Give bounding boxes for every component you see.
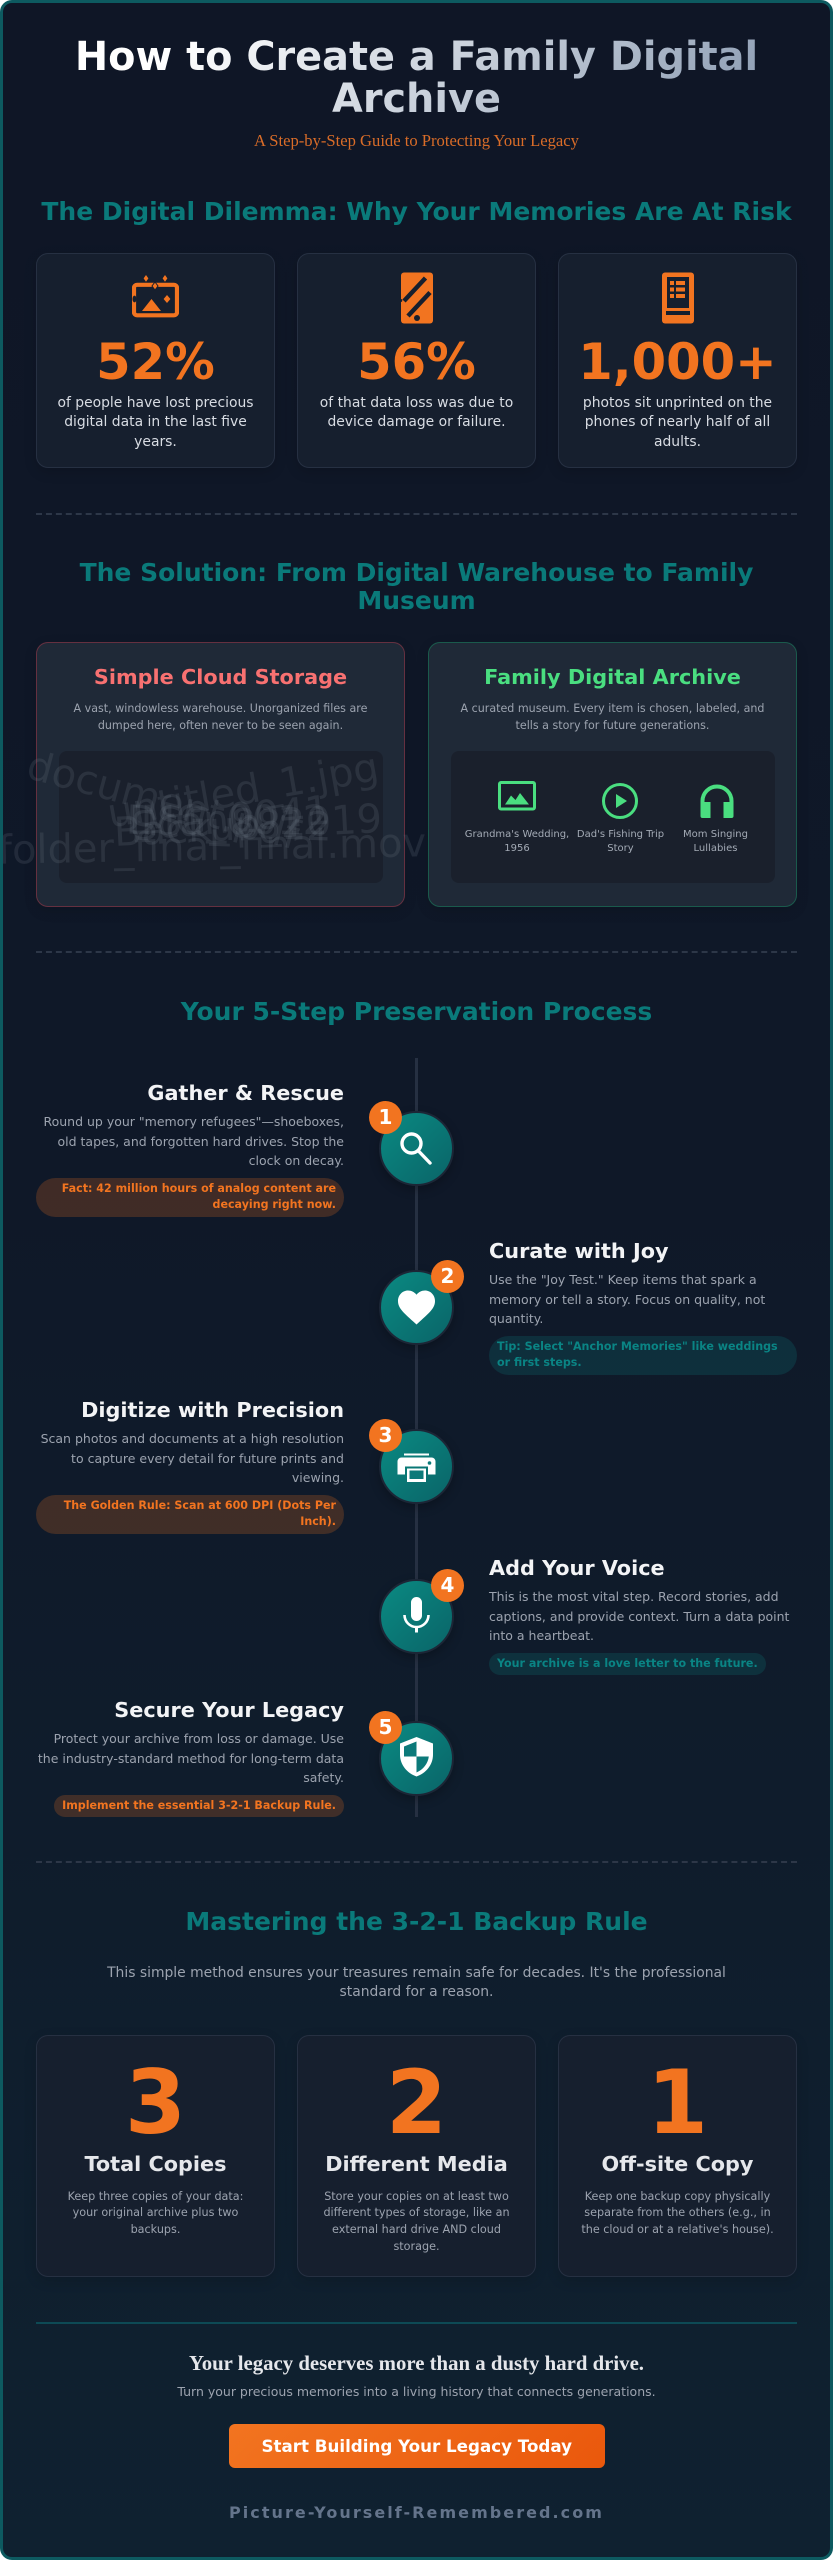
panel description: tells a story for future generations. <box>516 719 709 732</box>
step 3 text: Inch). <box>300 1515 336 1528</box>
footer url: Picture-Yourself-Remembered.com <box>229 2502 604 2522</box>
label: 1956 <box>504 842 530 854</box>
curated items box <box>450 751 774 883</box>
badge 1 <box>369 1101 402 1134</box>
step 5 text <box>38 1698 344 1817</box>
subtitle: A Step-by-Step Guide to Protecting Your Legacy <box>254 131 579 150</box>
stat description: of people have lost precious <box>57 394 254 410</box>
icon: microphone <box>403 1597 430 1632</box>
panel description: dumped here, often never to be seen again. <box>98 719 343 732</box>
badge 1: 1 <box>379 1105 392 1129</box>
panel title: Simple Cloud Storage <box>94 665 347 689</box>
card description: Keep one backup copy physically <box>585 2190 770 2203</box>
badge 4: 4 <box>441 1573 454 1597</box>
title: Archive <box>332 76 501 122</box>
backup intro text <box>107 1964 726 2000</box>
panel description <box>74 702 367 732</box>
step 1 text: Round up your "memory refugees"—shoeboxes, <box>43 1114 344 1129</box>
title: How to Create a Family Digital <box>75 34 758 80</box>
badge 5 <box>369 1711 402 1744</box>
label: Grandma's Wedding, <box>465 828 569 840</box>
scattered files box: folder_final_final.mov <box>0 820 427 874</box>
step 3 text <box>36 1398 344 1534</box>
step 2 text: Use the "Joy Test." Keep items that spark a <box>489 1272 757 1287</box>
stat description: years. <box>134 434 177 450</box>
panel: family digital archive <box>428 642 797 907</box>
step 5 text: Secure Your Legacy <box>114 1698 344 1722</box>
step 4 text: Add Your Voice <box>489 1556 665 1580</box>
step 3 text: to capture every detail for future prints and <box>71 1450 344 1466</box>
card description: Store your copies on at least two <box>324 2190 509 2203</box>
badge 3: 3 <box>379 1423 392 1447</box>
stat number: 52% <box>96 333 215 391</box>
icon: heart <box>398 1290 435 1324</box>
stat description: device damage or failure. <box>327 414 506 430</box>
step 2 text <box>489 1239 797 1375</box>
button <box>228 2424 605 2468</box>
step 5 text: Protect your archive from loss or damage. Use <box>54 1731 344 1746</box>
label <box>577 828 664 854</box>
step 1 text: decaying right now. <box>213 1198 336 1211</box>
badge 4 <box>431 1569 464 1602</box>
scattered files box <box>58 751 382 883</box>
step 5 text: the industry-standard method for long-term data <box>38 1750 344 1766</box>
step 2 text: Curate with Joy <box>489 1239 669 1263</box>
step 5 node <box>369 1711 454 1800</box>
badge 2 <box>431 1260 464 1293</box>
step 4 text: captions, and provide context. Turn a data point <box>489 1608 789 1624</box>
step 1 text: Fact: 42 million hours of analog content are <box>62 1182 336 1194</box>
card description: storage. <box>393 2240 440 2253</box>
stat description: digital data in the last five <box>64 414 247 430</box>
big number: 2 <box>386 2051 447 2154</box>
label: Dad's Fishing Trip <box>577 828 664 840</box>
card description <box>581 2190 774 2236</box>
icon: shield <box>400 1737 433 1776</box>
heading: the solution: The Solution: From Digital Warehouse to Family <box>80 558 753 586</box>
panel title: Family Digital Archive <box>484 665 741 689</box>
card description: different types of storage, like an <box>323 2206 510 2219</box>
badge 2: 2 <box>441 1264 454 1288</box>
step 4 text: into a heartbeat. <box>489 1628 594 1643</box>
step 4 text: Your archive is a love letter to the future. <box>497 1656 758 1670</box>
label: Story <box>607 842 634 854</box>
closing headline: Your legacy deserves more than a dusty hard drive. <box>189 2352 644 2375</box>
stat description: adults. <box>654 434 701 450</box>
scattered files box: untitled_1.jpg <box>103 745 382 837</box>
step 3 node <box>369 1419 454 1508</box>
button: Start Building Your Legacy Today <box>262 2436 572 2456</box>
big number: 3 <box>125 2051 186 2154</box>
icon: printer <box>398 1454 436 1482</box>
icon: photograph <box>498 781 536 810</box>
scattered files box: DSC_8812 <box>125 797 332 851</box>
stat description <box>57 394 254 450</box>
panel: 2 different media <box>297 2035 536 2277</box>
panel: stat 56% <box>297 253 536 468</box>
panel: simple cloud storage <box>36 642 405 907</box>
step 2 text: quantity. <box>489 1311 543 1326</box>
label <box>683 828 748 854</box>
card title: Total Copies <box>84 2152 227 2176</box>
step 2 node <box>379 1260 464 1348</box>
badge 5: 5 <box>379 1715 392 1739</box>
heading: the solution <box>80 558 753 615</box>
panel: 1 off-site copy <box>558 2035 797 2277</box>
card title: Off-site Copy <box>602 2152 753 2176</box>
step 5 text: Implement the essential 3-2-1 Backup Rule. <box>62 1798 336 1812</box>
stat description: of that data loss was due to <box>320 394 513 410</box>
timeline line <box>415 1058 418 1817</box>
card title: Different Media <box>325 2152 508 2176</box>
backup intro text: standard for a reason. <box>340 1984 493 2000</box>
closing subtext: Turn your precious memories into a living history that connects generations. <box>177 2384 656 2398</box>
card description: separate from the others (e.g., in <box>584 2206 771 2219</box>
backup intro text: This simple method ensures your treasures remain safe for decades. It's the professional <box>107 1964 726 1980</box>
label: Lullabies <box>694 842 737 854</box>
badge 3 <box>369 1419 402 1452</box>
card description <box>68 2190 243 2236</box>
label: Mom Singing <box>683 828 748 840</box>
step 5 text: safety. <box>303 1770 344 1785</box>
step 2 text: Tip: Select "Anchor Memories" like weddings <box>497 1340 778 1352</box>
card description: the cloud or at a relative's house). <box>581 2223 774 2236</box>
stat description <box>320 394 513 430</box>
step 2 text: memory or tell a story. Focus on quality, not <box>489 1292 765 1306</box>
card description: Keep three copies of your data: <box>68 2190 243 2203</box>
step 3 text: Scan photos and documents at a high resolution <box>41 1431 344 1446</box>
scattered files box: document.pdf <box>22 743 303 859</box>
icon: headphones <box>700 784 734 818</box>
step 1 text: old tapes, and forgotten hard drives. Stop the <box>57 1134 344 1148</box>
step 1 text: clock on decay. <box>249 1153 344 1168</box>
step 1 node <box>369 1101 454 1190</box>
heading: the solution: Museum <box>357 586 476 615</box>
icon: phone with photo grid <box>662 272 694 324</box>
heading: 5-step process: Your 5-Step Preservation Process <box>181 996 652 1026</box>
card description: external hard drive AND cloud <box>332 2223 501 2236</box>
heading: the digital dilemma: The Digital Dilemma: Why Your Memories Are At Risk <box>41 196 792 226</box>
stat number: 1,000+ <box>578 333 777 391</box>
panel description: A curated museum. Every item is chosen, labeled, and <box>461 702 764 715</box>
icon: play story <box>602 783 638 819</box>
card description: your original archive plus two <box>73 2206 238 2219</box>
header <box>75 34 758 150</box>
title <box>0 36 833 120</box>
panel: stat 52% <box>36 253 275 468</box>
icon: cracked phone <box>401 272 433 324</box>
card description: backups. <box>131 2223 180 2236</box>
scattered files box: IMG_0012 <box>129 798 328 844</box>
card description <box>323 2190 510 2253</box>
step 3 text: The Golden Rule: Scan at 600 DPI (Dots Per <box>64 1498 336 1512</box>
step 4 node <box>379 1569 464 1658</box>
panel: stat 1,000+ <box>558 253 797 468</box>
step 1 text <box>36 1081 344 1217</box>
scattered files box: Backup_2019 <box>112 796 383 856</box>
panel: 3 total copies <box>36 2035 275 2277</box>
scattered files box: Scan0041 <box>129 787 332 851</box>
stat description: photos sit unprinted on the <box>583 394 772 410</box>
icon: photo with sparkles <box>132 275 179 318</box>
panel description <box>460 702 764 732</box>
step 4 text: This is the most vital step. Record stories, add <box>489 1589 779 1604</box>
label <box>465 828 569 854</box>
step 3 text: Digitize with Precision <box>81 1398 344 1422</box>
big number: 1 <box>647 2051 708 2154</box>
stat description <box>583 394 772 450</box>
panel description: A vast, windowless warehouse. Unorganized files are <box>74 702 367 715</box>
step 3 text: viewing. <box>292 1470 344 1485</box>
step 4 text <box>488 1556 790 1675</box>
stat description: phones of nearly half of all <box>585 414 770 430</box>
closing call to action <box>177 2352 656 2468</box>
step 2 text: or first steps. <box>497 1356 582 1369</box>
step 1 text: Gather & Rescue <box>147 1081 344 1105</box>
icon: magnifier <box>400 1132 432 1165</box>
heading: 3-2-1 backup rule: Mastering the 3-2-1 Backup Rule <box>185 1907 648 1936</box>
stat number: 56% <box>357 333 476 391</box>
